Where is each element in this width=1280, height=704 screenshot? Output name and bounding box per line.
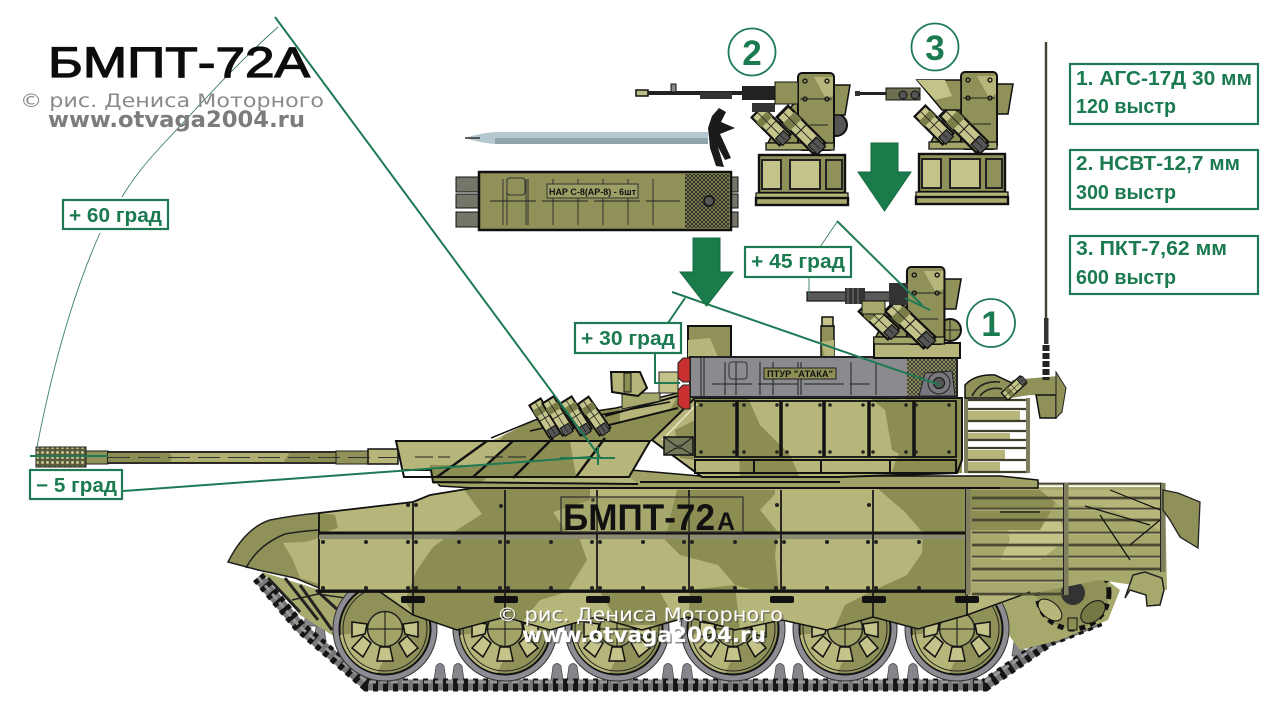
tank: superstructure	[396, 372, 1038, 488]
grenade launcher	[855, 80, 961, 110]
bottom watermark: © рис. Дениса Моторного	[498, 606, 784, 628]
rear fender	[1163, 490, 1200, 548]
red caps	[678, 358, 690, 409]
gun	[807, 283, 908, 314]
bottom watermark	[497, 604, 784, 648]
armament list: item 2: 2. НСВТ-12,7 мм	[1076, 152, 1240, 175]
hull armour skirt	[319, 488, 1030, 635]
rear cage	[966, 483, 1163, 595]
tank: gun barrel	[36, 447, 398, 467]
top watermark: www.otvaga2004.ru	[48, 108, 305, 133]
label: +30: + 30 град	[581, 328, 675, 350]
label: -5: − 5 град	[36, 475, 117, 497]
ATAKA label: ПТУР "АТАКА"	[767, 369, 833, 379]
hull front glacis	[228, 513, 319, 588]
label: +30	[575, 323, 681, 353]
armament list: item 1: 120 выстр	[1076, 95, 1176, 118]
arrow: rocket pod to launcher	[680, 238, 733, 306]
machine gun	[636, 82, 798, 112]
label: +60: + 60 град	[69, 205, 162, 227]
top watermark	[20, 90, 324, 133]
top box	[688, 326, 731, 357]
launcher body	[690, 357, 957, 397]
track teeth	[304, 610, 1042, 680]
stowed coil and sight	[965, 372, 1066, 418]
tank: hull	[228, 483, 1200, 635]
title: БМПТ-72А	[48, 39, 310, 87]
armament list: item 1	[1070, 64, 1258, 124]
top watermark: © рис. Дениса Моторного	[20, 90, 324, 112]
tank: running gear	[258, 557, 1120, 685]
armament list: item 3	[1070, 236, 1258, 294]
armament list: item 2: 300 выстр	[1076, 181, 1176, 204]
hull plate: БМПТ-72	[563, 497, 715, 538]
label: -5	[30, 470, 122, 499]
track	[258, 577, 1100, 685]
number 2: 2	[742, 34, 762, 73]
number 3	[912, 24, 958, 70]
armament list: item 1: 1. АГС-17Д 30 мм	[1076, 67, 1252, 90]
antenna	[1044, 42, 1048, 380]
upper rear cage	[966, 398, 1028, 473]
number 1	[967, 299, 1015, 347]
commander cupola	[611, 372, 678, 409]
rocket	[465, 108, 735, 167]
label: +60	[63, 200, 168, 229]
rear sprocket	[1000, 557, 1120, 650]
rocket pod	[456, 172, 738, 230]
weapon station 1	[807, 267, 961, 358]
weapon station 2	[636, 73, 850, 205]
armament list: item 3: 600 выстр	[1076, 266, 1176, 289]
rocket pod label: НАР С-8(АР-8) - 6шт	[549, 187, 636, 198]
side armour block	[652, 398, 962, 478]
smoke launchers	[529, 396, 611, 439]
road wheels	[333, 577, 1009, 681]
vision block	[664, 437, 693, 455]
arrow: stations to launcher	[858, 143, 911, 211]
bottom watermark: © рис. Дениса Моторного	[497, 604, 783, 626]
armament list: item 2	[1070, 150, 1258, 209]
number 1: 1	[981, 305, 1001, 344]
bottom watermark: www.otvaga2004.ru	[524, 624, 768, 648]
turret	[396, 392, 700, 484]
number 2	[728, 28, 776, 76]
label: +45: + 45 град	[751, 251, 845, 273]
angle lines	[30, 17, 940, 491]
bottom watermark: www.otvaga2004.ru	[522, 623, 766, 647]
front idler	[262, 572, 370, 640]
ATAKA launcher	[678, 317, 957, 409]
tow hook	[1125, 572, 1164, 606]
number 3: 3	[925, 29, 945, 68]
hull rear	[966, 487, 1167, 615]
armament list: item 3: 3. ПКТ-7,62 мм	[1076, 237, 1227, 260]
label: +45	[745, 247, 851, 277]
periscope	[821, 317, 834, 357]
hull plate: А	[717, 508, 735, 536]
deck band	[433, 470, 1038, 488]
weapon station 3	[855, 72, 1013, 204]
